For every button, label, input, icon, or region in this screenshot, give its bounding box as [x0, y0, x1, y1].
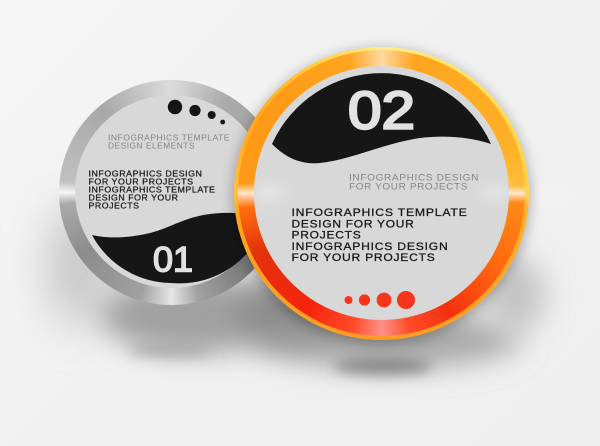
grey text: circle 01 [108, 132, 230, 150]
panel: circle 02 face [254, 66, 509, 320]
black text: circle 01: DESIGN FOR YOUR [88, 193, 178, 203]
grey text: circle 02: FOR YOUR PROJECTS [349, 182, 468, 193]
grey text: circle 01: INFOGRAPHICS TEMPLATE [108, 132, 230, 142]
black text: circle 02: DESIGN FOR YOUR [292, 218, 414, 230]
panel: circle 02 ring [238, 50, 525, 336]
grey text: circle 02: INFOGRAPHICS DESIGN [349, 173, 479, 184]
black text: circle 02: INFOGRAPHICS DESIGN [292, 241, 448, 253]
black text: circle 01 [88, 169, 216, 211]
panel: circle 01 ring [59, 80, 284, 305]
black text: circle 01: PROJECTS [88, 201, 140, 211]
panel: circle 01 face [75, 95, 268, 288]
face highlights [254, 187, 511, 199]
grey text: circle 02 [349, 173, 479, 193]
panel: circle 02 rim [234, 47, 529, 340]
black text: circle 02: FOR YOUR PROJECTS [292, 252, 436, 264]
black text: circle 01: INFOGRAPHICS TEMPLATE [88, 185, 216, 195]
dots: circle 01 [168, 100, 225, 124]
black text: circle 01: INFOGRAPHICS DESIGN [88, 169, 202, 179]
black text: circle 02: PROJECTS [292, 230, 362, 242]
black text: circle 01: FOR YOUR PROJECTS [88, 177, 194, 187]
dots: circle 02 [344, 291, 415, 309]
number 01: 01 [153, 240, 193, 280]
number 02: 02 [348, 82, 415, 140]
grey text: circle 01: DESIGN ELEMENTS [108, 140, 195, 150]
black text: circle 02: INFOGRAPHICS TEMPLATE [292, 207, 468, 219]
black wave: 01 [92, 213, 250, 283]
black text: circle 02 [292, 207, 468, 264]
black wave: 02 [272, 73, 491, 163]
